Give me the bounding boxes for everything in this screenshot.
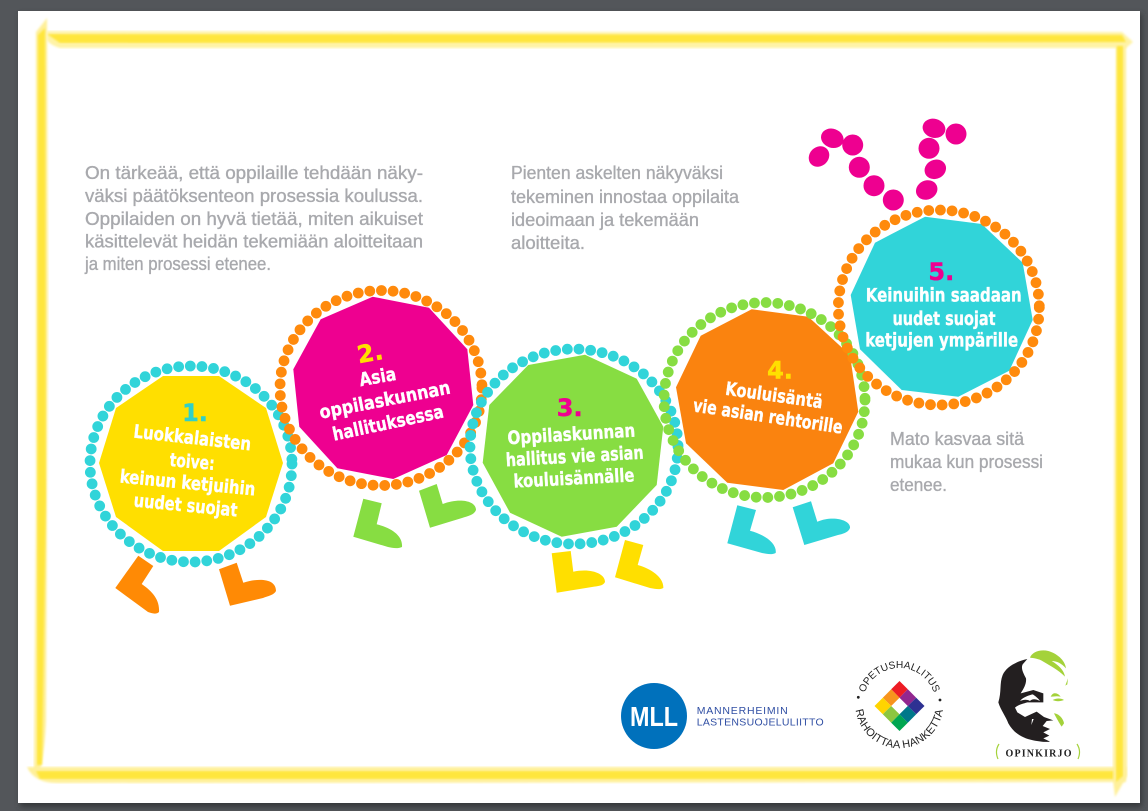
- step 1 label: toive:: [169, 450, 216, 475]
- step 2 label: [318, 337, 452, 446]
- step 1 label: Luokkalaisten: [133, 422, 252, 455]
- boots: yellow: [552, 540, 663, 593]
- orange decagon: [676, 309, 858, 490]
- worm segment 1: [90, 366, 292, 614]
- step 5 label: uudet suojat: [892, 309, 996, 330]
- worm segment 3: [470, 349, 678, 593]
- dotted ring: orange: [838, 210, 1039, 405]
- text block: decision process: käsittelevät heidän tekemiään aloitteitaan: [85, 232, 423, 252]
- yellow decagon: [99, 376, 283, 551]
- worm segment 5: head: [805, 116, 1039, 405]
- cyan decagon: [851, 217, 1033, 397]
- text block: worm grows: Mato kasvaa sitä: [890, 429, 1025, 449]
- step 5 label: Keinuihin saadaan: [866, 286, 1022, 307]
- text block: worm grows: [890, 429, 1043, 495]
- logo: MLL: MLL: [630, 701, 678, 732]
- rainbow diamond: [874, 681, 924, 731]
- step 5 label: ketjujen ympärille: [865, 331, 1018, 352]
- text block: decision process: väksi päätöksenteon prosessia koulussa.: [85, 186, 423, 206]
- pink decagon: [293, 297, 473, 479]
- step 1 label: 1.: [182, 399, 208, 427]
- step 3 label: kouluisännälle: [513, 465, 635, 493]
- step 5 label: 5.: [928, 258, 954, 286]
- step 3 label: Oppilaskunnan: [507, 421, 636, 449]
- text block: small steps: aloitteita.: [511, 233, 585, 253]
- step 2 label: oppilaskunnan: [318, 378, 452, 424]
- text block: small steps: ideoimaan ja tekemään: [511, 210, 699, 230]
- green brackets: [996, 744, 1080, 759]
- ring text: OPETUSHALLITUS: [859, 661, 940, 692]
- dotted ring: orange: [280, 290, 482, 486]
- step 4 label: 4.: [767, 356, 793, 384]
- step 1 label: uudet suojat: [133, 491, 238, 521]
- logo: MLL: LASTENSUOJELULIITTO: [697, 717, 824, 729]
- step 4 label: Kouluisäntä: [724, 379, 824, 413]
- step 5 label: [865, 258, 1022, 352]
- logo: Opetushallitus: [856, 661, 943, 748]
- step 2 label: hallituksessa: [331, 402, 446, 446]
- text block: decision process: ja miten prosessi etenee.: [84, 254, 271, 274]
- dotted ring: green: [664, 302, 865, 498]
- ring text: [856, 661, 943, 748]
- step 4 label: [692, 356, 844, 439]
- logo: MLL: MANNERHEIMIN: [697, 705, 788, 717]
- text block: small steps: Pienten askelten näkyväksi: [511, 163, 723, 183]
- step 2 label: 2.: [355, 337, 385, 369]
- boots: green: [353, 484, 476, 548]
- wordmark: OPINKIRJO: [1006, 748, 1072, 760]
- step 3 label: [505, 394, 644, 493]
- step 1 label: keinun ketjuihin: [119, 467, 256, 500]
- dotted ring: cyan: [470, 349, 678, 544]
- logo: Opinkirjo: [996, 650, 1080, 760]
- boots: orange: [115, 556, 276, 614]
- dotted ring: cyan: [90, 366, 292, 562]
- ring text: RAHOITTAA HANKETTA: [856, 709, 943, 748]
- step 1 label: [119, 399, 256, 521]
- text block: worm grows: mukaa kun prosessi: [890, 452, 1043, 472]
- worm segment 2: [280, 290, 482, 548]
- antennae: pink blobs: [805, 116, 966, 210]
- step 3 label: hallitus vie asian: [505, 443, 644, 471]
- face silhouette: [998, 650, 1068, 742]
- step 3 label: 3.: [557, 394, 583, 422]
- text block: decision process: On tärkeää, että oppilaille tehdään näky-: [85, 163, 423, 183]
- step 2 label: Asia: [358, 364, 398, 391]
- step 4 label: vie asian rehtorille: [692, 396, 844, 439]
- text block: decision process: Oppilaiden on hyvä tietää, miten aikuiset: [85, 209, 423, 229]
- boots: cyan: [727, 501, 850, 554]
- text block: decision process: [84, 163, 423, 274]
- green decagon: [483, 355, 663, 537]
- worm segment 4: [664, 302, 865, 554]
- text block: worm grows: etenee.: [890, 475, 947, 495]
- text block: small steps: tekeminen innostaa oppilaita: [511, 187, 740, 207]
- logo: MLL: [621, 683, 824, 749]
- text block: small steps: [511, 163, 740, 253]
